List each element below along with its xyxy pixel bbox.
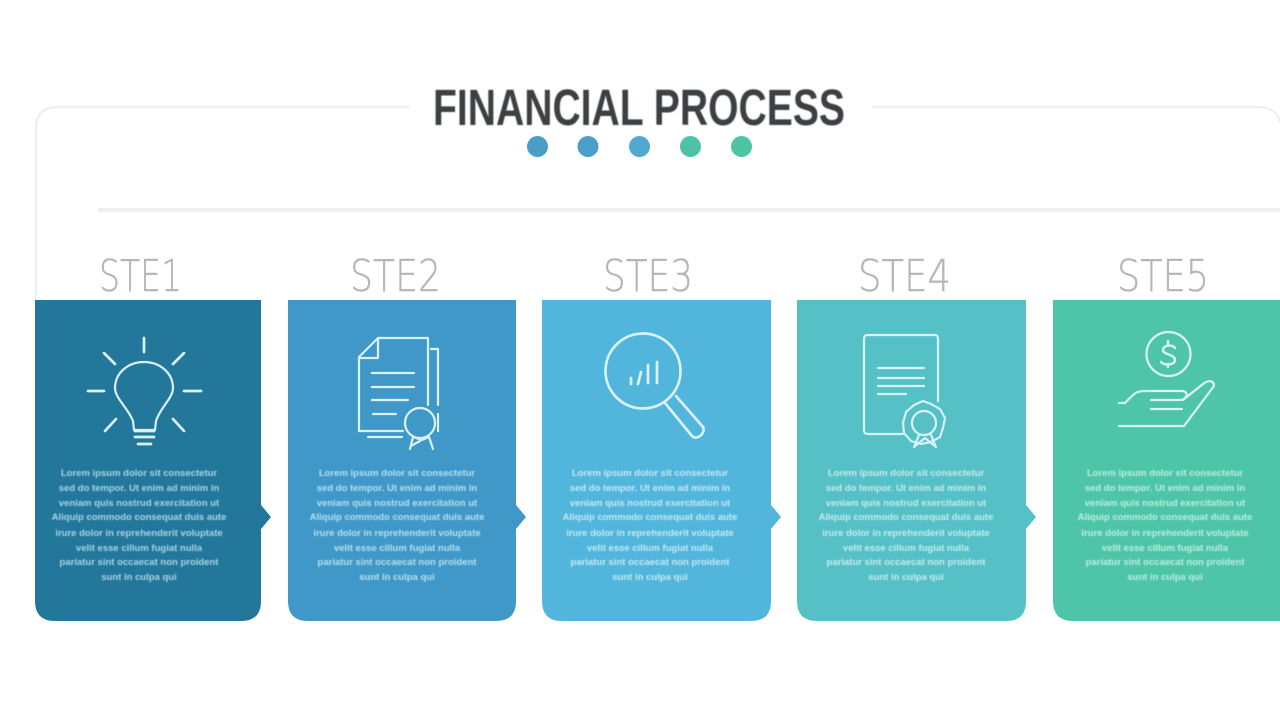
panel: step 3 bbox=[542, 300, 781, 621]
body text 5: sunt in culpa qui bbox=[1127, 572, 1203, 583]
body text 4 bbox=[819, 468, 993, 583]
body text 3: Lorem ipsum dolor sit consectetur bbox=[572, 468, 728, 479]
body text 4: sed do tempor. Ut enim ad minim in bbox=[826, 483, 986, 494]
body text 2: Lorem ipsum dolor sit consectetur bbox=[319, 468, 475, 479]
body text 4: Aliquip commodo consequat duis aute bbox=[819, 512, 993, 523]
body text 3 bbox=[563, 468, 737, 583]
step label 4: STE4 bbox=[858, 251, 951, 302]
body text 4: sunt in culpa qui bbox=[868, 572, 944, 583]
body text 2: veniam quis nostrud exercitation ut bbox=[317, 498, 478, 509]
card 4 background bbox=[797, 300, 1036, 621]
card 1 background bbox=[35, 300, 271, 621]
body text 4: velit esse cillum fugiat nulla bbox=[843, 543, 970, 554]
divider line bbox=[98, 208, 1280, 212]
body text 4: pariatur sint occaecat non proident bbox=[827, 557, 986, 568]
body text 5: Aliquip commodo consequat duis aute bbox=[1078, 512, 1252, 523]
body text 2: sed do tempor. Ut enim ad minim in bbox=[317, 483, 477, 494]
card 2 background bbox=[288, 300, 526, 621]
icon: magnifying glass with bars bbox=[606, 334, 704, 438]
body text 5: pariatur sint occaecat non proident bbox=[1086, 557, 1245, 568]
icon: light bulb bbox=[88, 338, 201, 444]
body text 1: velit esse cillum fugiat nulla bbox=[76, 543, 203, 554]
panel: step 2 bbox=[288, 300, 526, 621]
body text 1: veniam quis nostrud exercitation ut bbox=[59, 498, 220, 509]
body text 1: pariatur sint occaecat non proident bbox=[60, 557, 219, 568]
frame outline bbox=[36, 107, 1280, 300]
body text 3: sunt in culpa qui bbox=[612, 572, 688, 583]
icon: hand with coin bbox=[1119, 332, 1214, 426]
body text 1: irure dolor in reprehenderit voluptate bbox=[55, 528, 223, 539]
step label 5: STE5 bbox=[1117, 251, 1209, 302]
body text 2: velit esse cillum fugiat nulla bbox=[334, 543, 461, 554]
body text 5: velit esse cillum fugiat nulla bbox=[1102, 543, 1229, 554]
body text 5 bbox=[1078, 468, 1252, 583]
body text 3: irure dolor in reprehenderit voluptate bbox=[566, 528, 734, 539]
body text 4: veniam quis nostrud exercitation ut bbox=[826, 498, 987, 509]
body text 2: Aliquip commodo consequat duis aute bbox=[310, 512, 484, 523]
body text 1: sed do tempor. Ut enim ad minim in bbox=[59, 483, 219, 494]
card 5 background bbox=[1053, 300, 1280, 621]
body text 2 bbox=[310, 468, 484, 583]
step label 1: STE1 bbox=[99, 251, 182, 302]
body text 1: Lorem ipsum dolor sit consectetur bbox=[61, 468, 217, 479]
body text 3: veniam quis nostrud exercitation ut bbox=[570, 498, 731, 509]
body text 5: Lorem ipsum dolor sit consectetur bbox=[1087, 468, 1243, 479]
body text 5: veniam quis nostrud exercitation ut bbox=[1085, 498, 1246, 509]
card 3 background bbox=[542, 300, 781, 621]
panel: step 1 bbox=[35, 300, 271, 621]
body text 3: Aliquip commodo consequat duis aute bbox=[563, 512, 737, 523]
icon: document with seal bbox=[359, 338, 438, 449]
panel: step 5 bbox=[1053, 300, 1280, 621]
body text 3: sed do tempor. Ut enim ad minim in bbox=[570, 483, 730, 494]
body text 2: irure dolor in reprehenderit voluptate bbox=[313, 528, 481, 539]
body text 5: irure dolor in reprehenderit voluptate bbox=[1081, 528, 1249, 539]
step label 3: STE3 bbox=[603, 251, 693, 302]
body text 4: Lorem ipsum dolor sit consectetur bbox=[828, 468, 984, 479]
body text 1: Aliquip commodo consequat duis aute bbox=[52, 512, 226, 523]
body text 2: sunt in culpa qui bbox=[359, 572, 435, 583]
body text 2: pariatur sint occaecat non proident bbox=[318, 557, 477, 568]
step label 2: STE2 bbox=[350, 251, 441, 302]
body text 3: pariatur sint occaecat non proident bbox=[571, 557, 730, 568]
body text 4: irure dolor in reprehenderit voluptate bbox=[822, 528, 990, 539]
icon: certificate bbox=[864, 335, 945, 447]
body text 1: sunt in culpa qui bbox=[101, 572, 177, 583]
panel: step 4 bbox=[797, 300, 1036, 621]
body text 3: velit esse cillum fugiat nulla bbox=[587, 543, 714, 554]
body text 1 bbox=[52, 468, 226, 583]
title: FINANCIAL PROCESS bbox=[433, 79, 845, 136]
title dots bbox=[527, 136, 752, 157]
body text 5: sed do tempor. Ut enim ad minim in bbox=[1085, 483, 1245, 494]
